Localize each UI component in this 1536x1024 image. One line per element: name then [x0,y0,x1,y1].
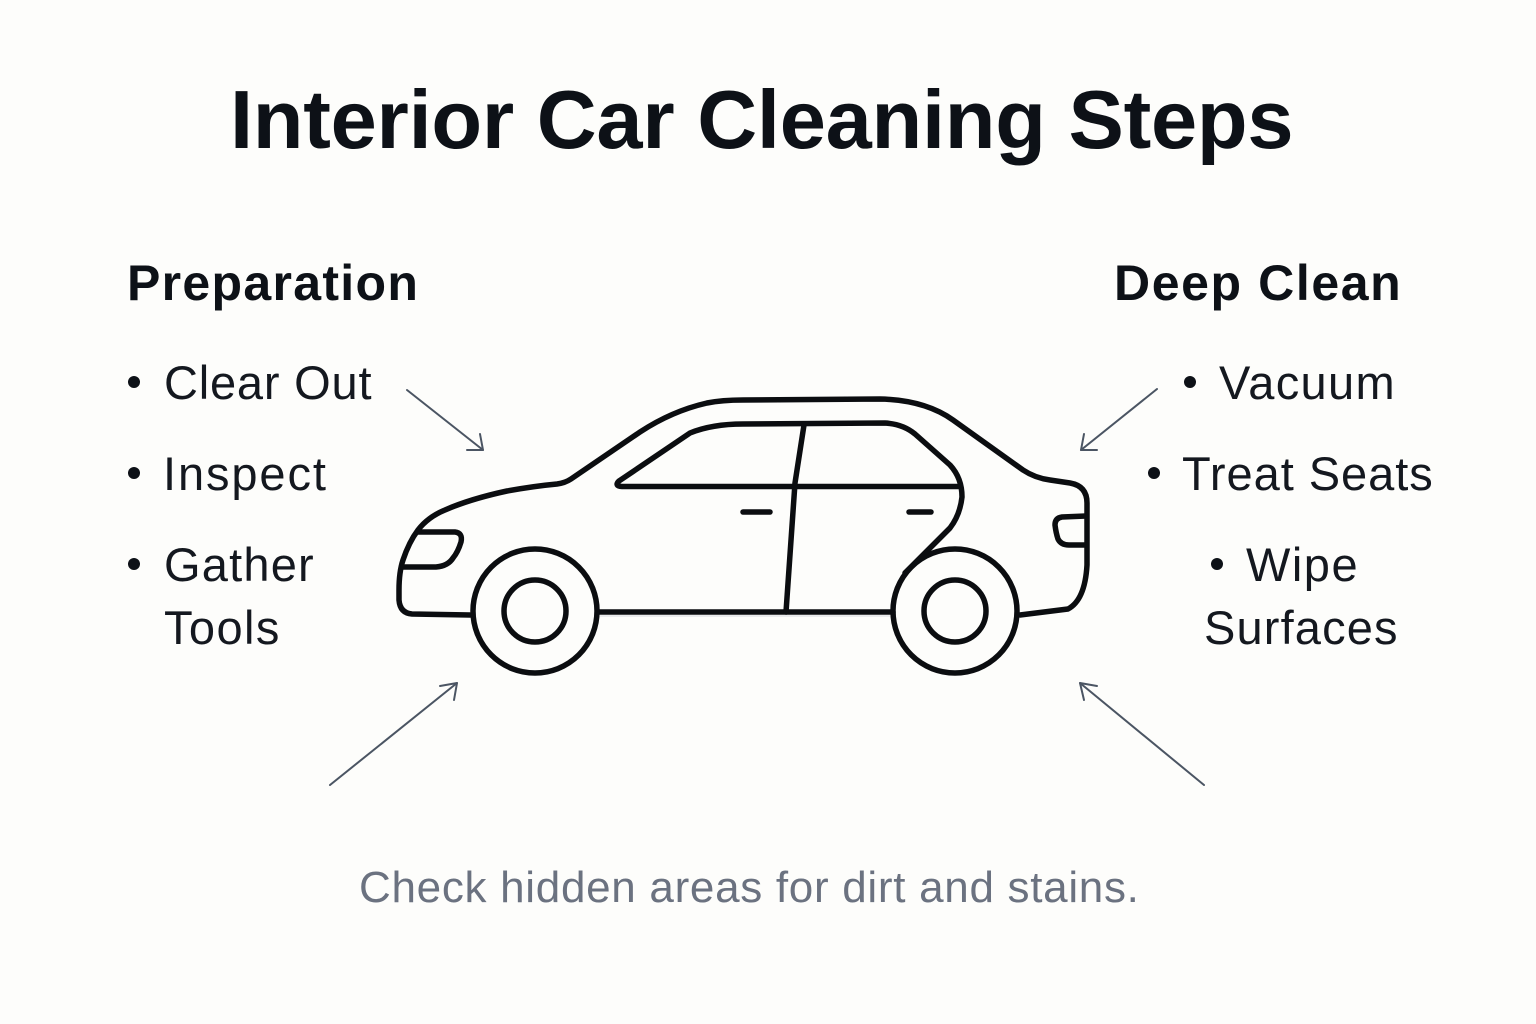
arrow: top left [407,390,483,450]
heading: deep clean: Deep Clean [1114,255,1402,311]
title: Interior Car Cleaning Steps [230,73,1293,166]
list item: vacuum: Vacuum [1219,356,1396,409]
list item: gather: Gather [164,538,315,591]
arrow: bottom left [330,683,457,785]
arrow: bottom right [1080,683,1204,785]
panel: deep clean [1114,255,1434,654]
icon: car [399,399,1087,673]
list item continuation: tools: Tools [164,601,281,654]
list item: inspect: Inspect [163,447,328,500]
list item continuation: surfaces: Surfaces [1204,601,1399,654]
arrow: top right [1081,389,1157,450]
list item: wipe: Wipe [1246,538,1359,591]
caption: Check hidden areas for dirt and stains. [359,863,1140,912]
list item: treat seats: Treat Seats [1182,447,1434,500]
heading: preparation: Preparation [127,255,419,311]
list item: clear out: Clear Out [164,356,372,409]
panel: preparation [127,255,419,654]
